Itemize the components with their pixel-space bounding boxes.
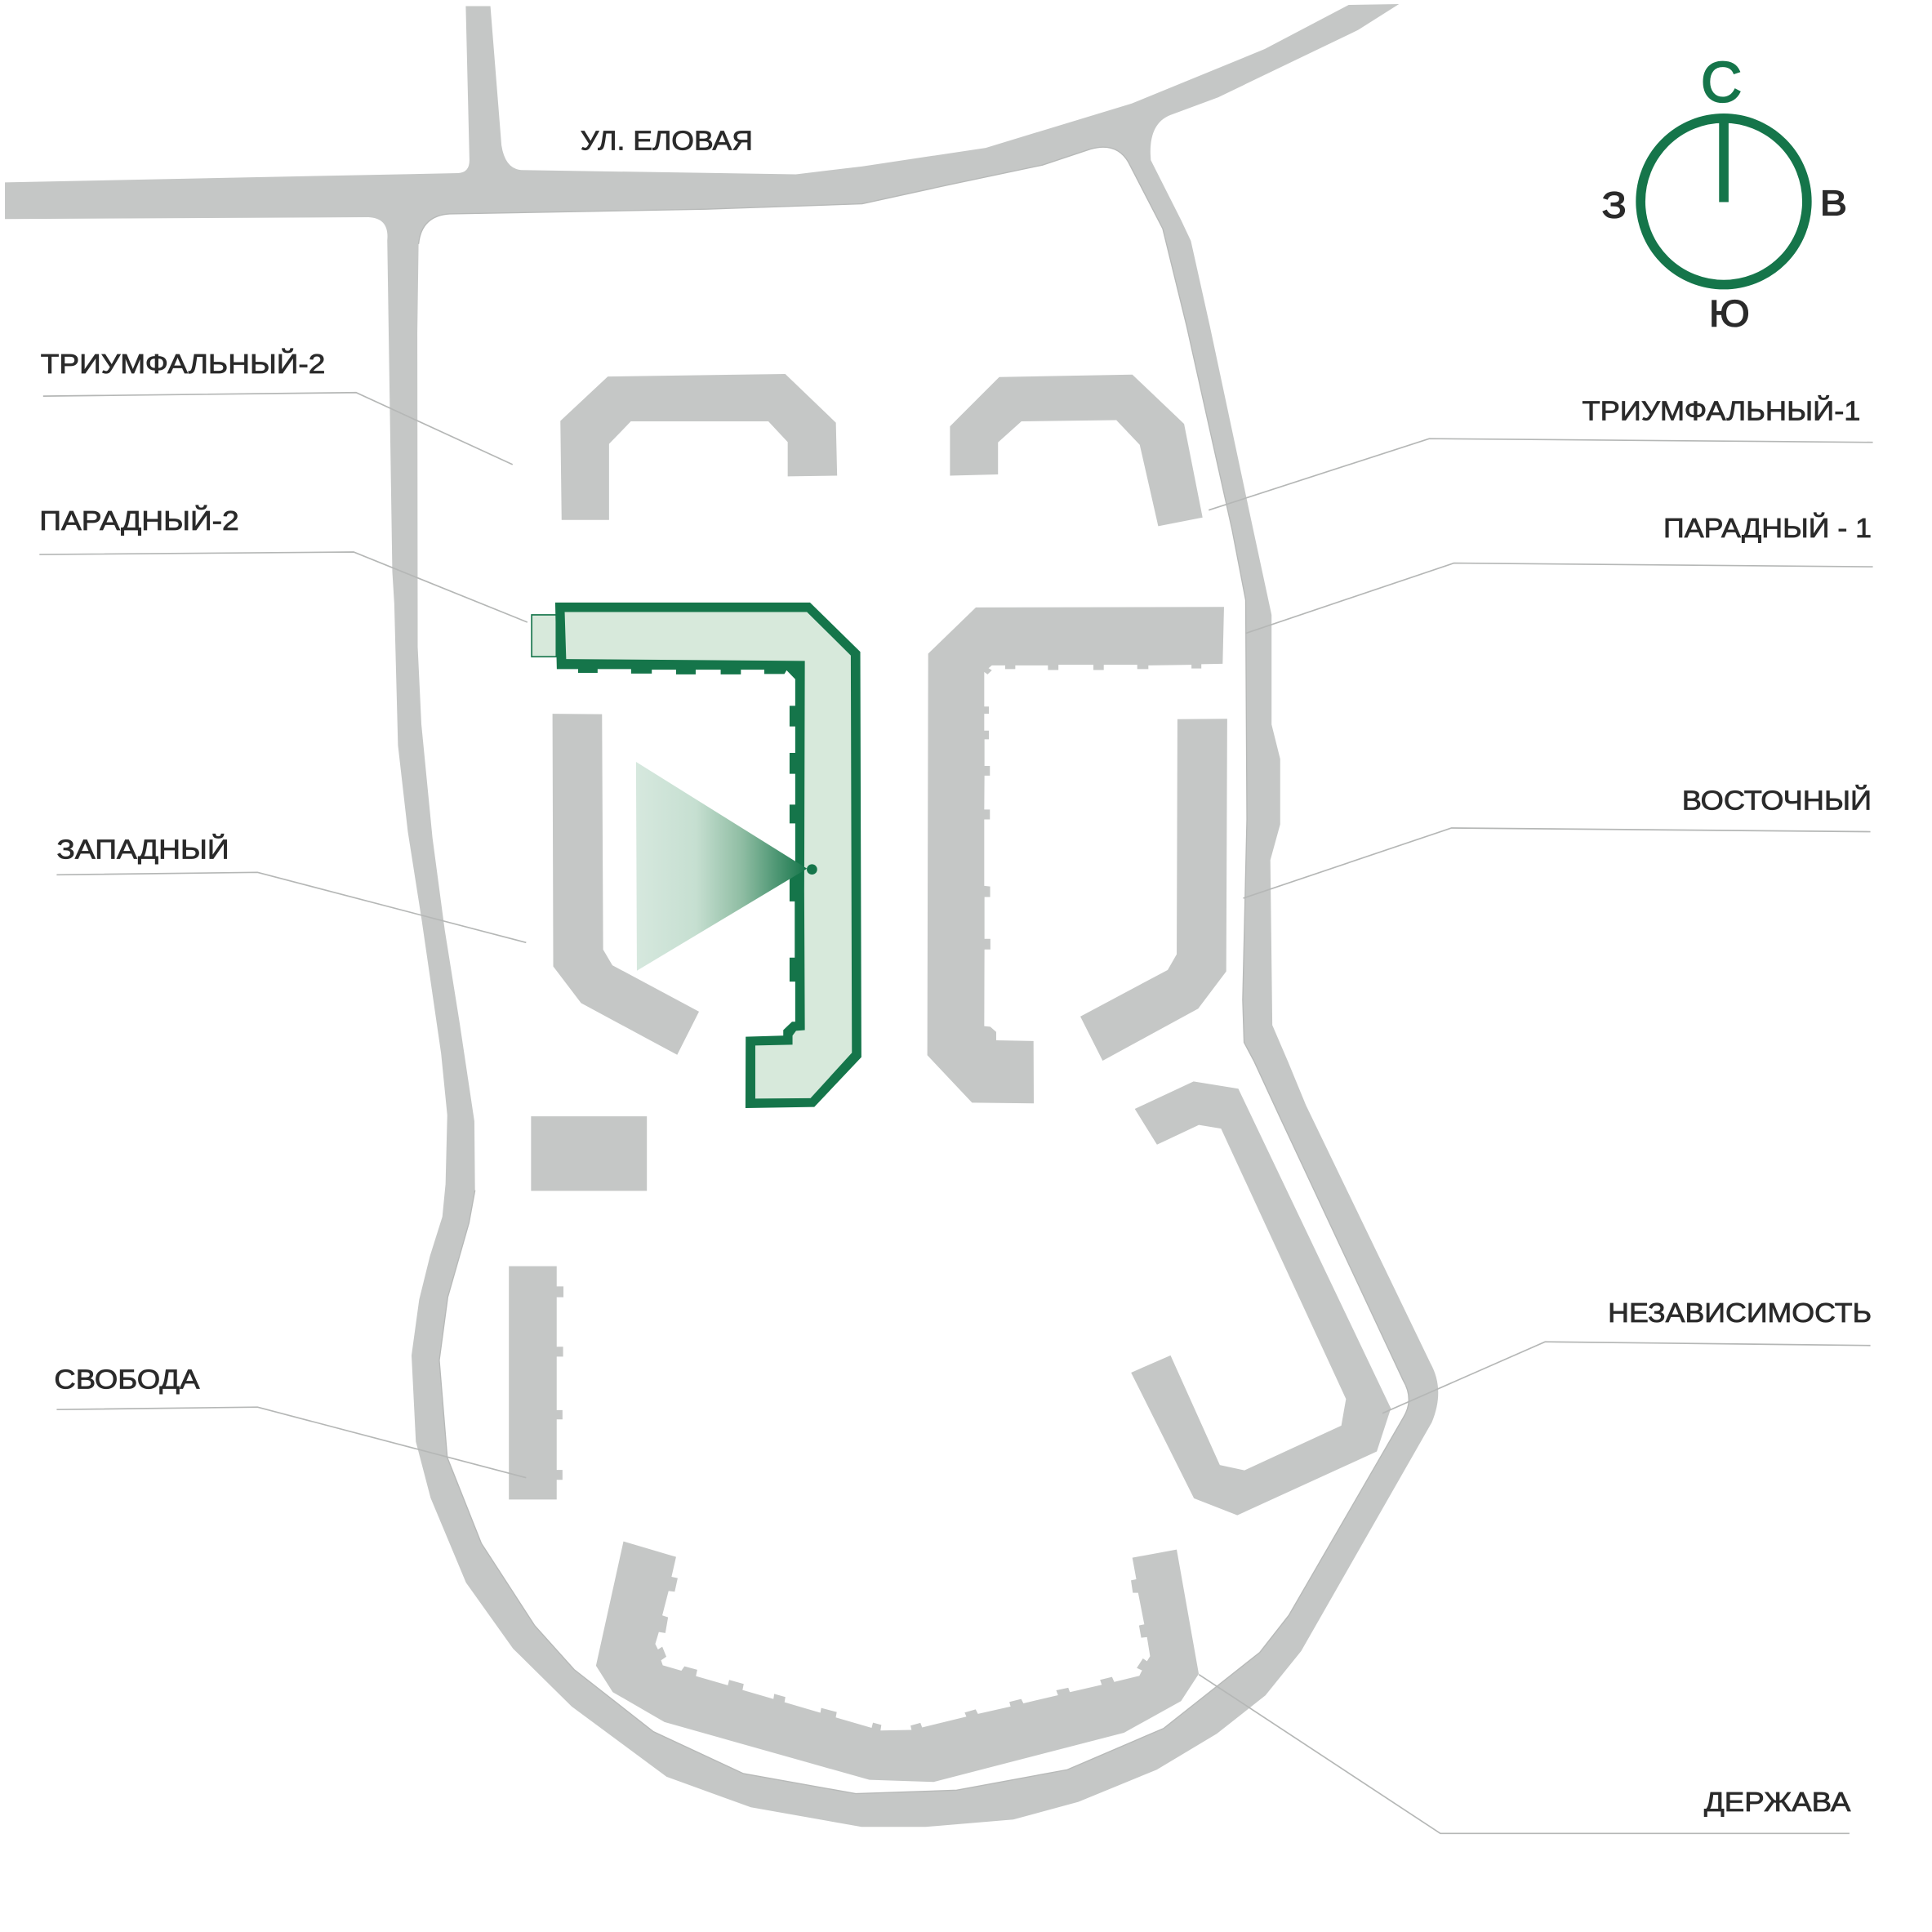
label: Парадный-1: ПАРАДНЫЙ - 1 [1663,513,1872,544]
south letter: Ю [1709,293,1750,335]
viewpoint dot [807,864,817,875]
street label: УЛ. ЕЛОВАЯ [581,126,753,156]
label: Триумфальный-2: ТРИУМФАЛЬНЫЙ-2 [41,349,325,380]
highlighted building: Парадный-2 [532,603,861,1108]
compass [1602,51,1847,335]
compass ring [1640,118,1807,285]
building: Восточный [1080,719,1227,1061]
building: Свобода [509,1266,563,1499]
building: Держава [596,1542,1199,1782]
compass needle [1719,116,1729,202]
roads network [5,4,1438,1827]
building: Западный [553,714,699,1055]
building outline [555,603,861,1108]
building: Триумфальный-1 [950,375,1203,526]
building: square block [531,1116,647,1191]
building: Парадный-1 [928,607,1224,1103]
label: Триумфальный-1: ТРИУМФАЛЬНЫЙ-1 [1582,396,1860,427]
leader lines [39,393,1873,1833]
label: Западный: ЗАПАДНЫЙ [56,835,229,866]
west letter: З [1602,184,1627,225]
building fill [565,612,852,1098]
label: Парадный-2: ПАРАДНЫЙ-2 [39,505,239,536]
east letter: В [1820,184,1847,224]
building: Независимость [1131,1081,1391,1516]
view cone [636,762,807,971]
label: Свобода: СВОБОДА [54,1365,200,1396]
north letter: С [1701,51,1742,114]
annex [532,615,556,657]
building: Триумфальный-2 [560,374,837,520]
label: Держава: ДЕРЖАВА [1704,1787,1851,1818]
label: Независимость: НЕЗАВИСИМОСТЬ [1608,1298,1872,1329]
label: Восточный: ВОСТОЧНЫЙ [1682,785,1872,816]
